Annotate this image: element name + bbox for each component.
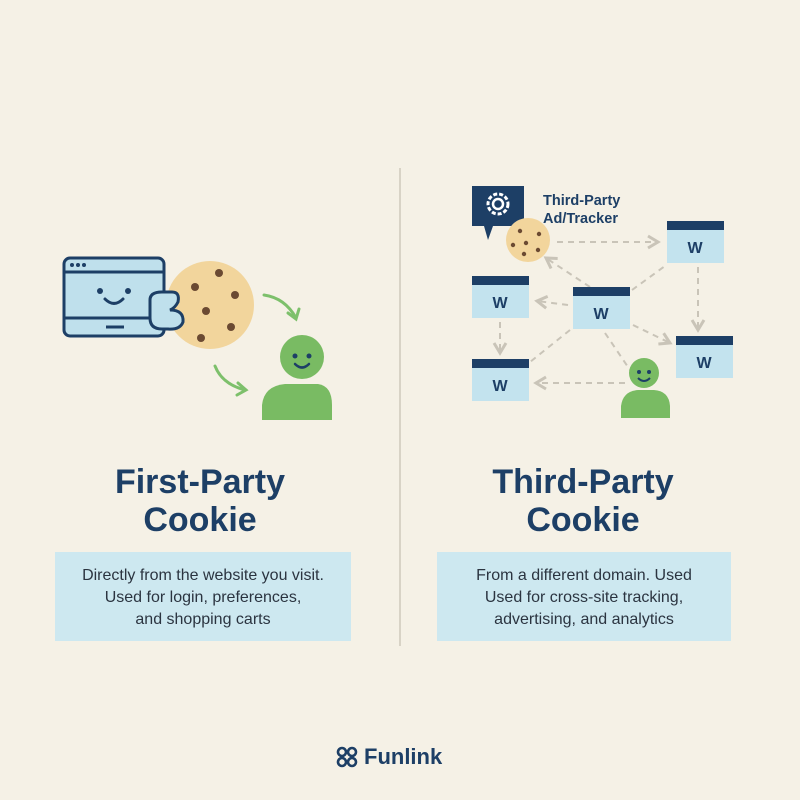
illustration: third-party network [472, 186, 733, 418]
heading: third-party [492, 463, 674, 539]
heading: first-party: Cookie [143, 501, 257, 539]
label: tracker: Third-Party [543, 193, 620, 209]
text box: third-party: Used for cross-site tracking, [485, 589, 683, 606]
icon: browser window [64, 258, 164, 336]
divider [399, 168, 401, 646]
website windows: W [593, 306, 609, 323]
heading: third-party: Cookie [526, 501, 640, 539]
illustration: third-party network: Ad/Tracker [543, 211, 618, 227]
heading: third-party: Third-Party [492, 463, 674, 501]
website windows: W [696, 355, 712, 372]
text box: third-party: advertising, and analytics [494, 611, 674, 628]
text box: third-party: From a different domain. Used [476, 567, 692, 584]
arrow [215, 366, 246, 395]
icon: small cookie [506, 218, 550, 262]
text box: first-party: Directly from the website you visit. [82, 567, 324, 584]
logo: Funlink [364, 744, 442, 769]
heading: first-party: First-Party [115, 463, 285, 501]
icon: tracker bubble [472, 186, 524, 240]
heading: first-party [115, 463, 285, 539]
text box: third-party [437, 552, 731, 641]
website windows: W [492, 378, 508, 395]
dashed connections [500, 242, 698, 383]
website windows [472, 221, 733, 401]
website windows: W [492, 295, 508, 312]
icon: person [621, 358, 670, 418]
text box: first-party: Used for login, preferences, [105, 589, 301, 606]
website windows: W [687, 240, 703, 257]
icon: hand [150, 292, 183, 329]
illustration: first-party [62, 256, 332, 420]
text box: first-party: and shopping carts [135, 611, 271, 628]
icon: person [262, 335, 332, 420]
text box: first-party [55, 552, 351, 641]
icon: cookie [166, 261, 254, 349]
arrow [264, 295, 299, 319]
